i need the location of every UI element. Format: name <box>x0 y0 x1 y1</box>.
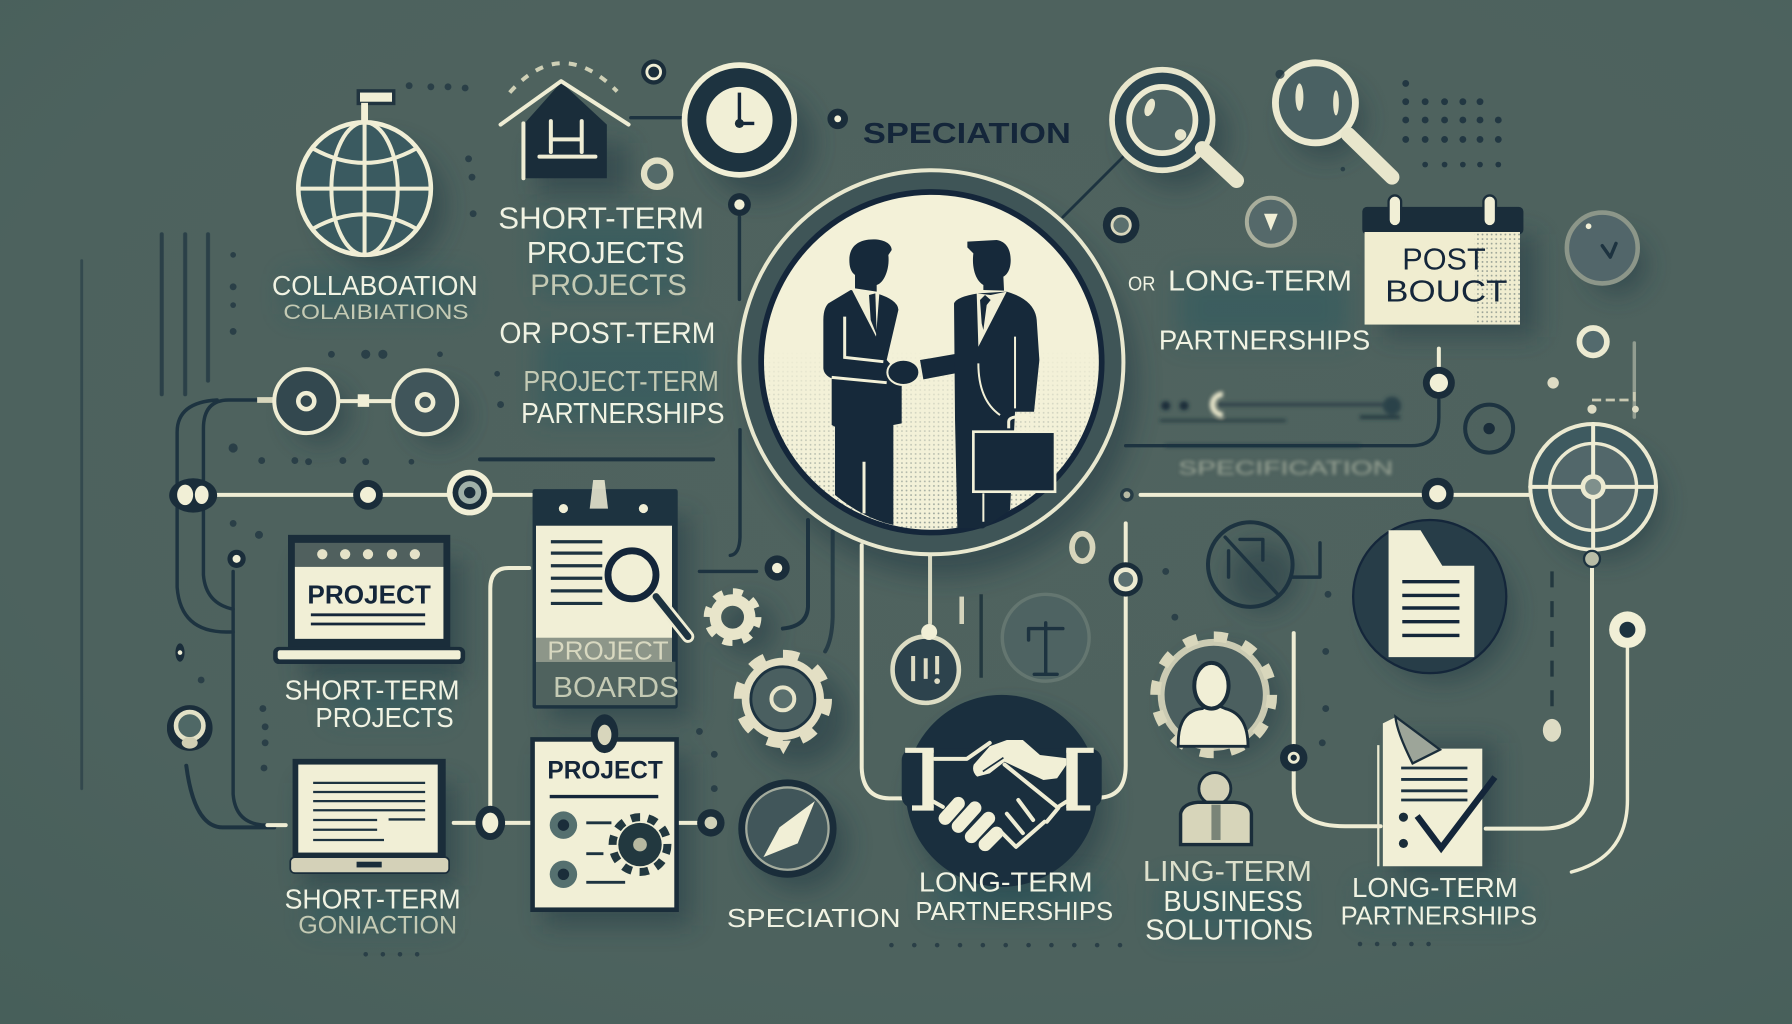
text block: long-term partnerships right: PARTNERSHIPS <box>1341 901 1537 931</box>
text block: short-term conduction <box>285 884 461 940</box>
icon: compass <box>738 779 837 878</box>
text block: collaboration <box>272 270 478 324</box>
text block: long-term partnerships upper: PARTNERSHIPS <box>1159 325 1370 356</box>
icon: document in circle <box>1353 520 1506 673</box>
text block: long-term business solutions: LING-TERM <box>1143 856 1312 888</box>
icon: linked circles <box>257 369 457 434</box>
two business people shaking hands <box>823 239 1055 528</box>
text block: short-term projects: PARTNERSHIPS <box>521 398 725 430</box>
halftone shading <box>764 362 1098 528</box>
text block: long-term business solutions <box>1143 856 1313 946</box>
icon: large gear <box>738 654 827 754</box>
small ring nodes upper left <box>641 59 848 216</box>
light connector traces <box>214 349 1627 872</box>
text block: long-term business solutions: BUSINESS <box>1163 886 1303 918</box>
blurred specification caption <box>1160 394 1401 479</box>
icon: magnifier two <box>1275 63 1392 177</box>
text block: short-term conduction: SHORT-TERM <box>285 884 461 915</box>
text block: long-term partnerships right <box>1341 872 1537 931</box>
text block: short-term projects: PROJECTS <box>530 269 687 302</box>
text block: collaboration: COLLABOATION <box>272 270 478 301</box>
infographic canvas <box>80 59 1666 957</box>
text block: collaboration: COLAIBIATIONS <box>283 299 469 324</box>
icon: magnifier one <box>1112 70 1237 181</box>
text: speciation lower: SPECIATION <box>727 903 901 933</box>
text block: long-term partnerships upper <box>1128 265 1370 356</box>
text block: long-term partnerships upper: OR <box>1128 272 1155 295</box>
text block: long-term business solutions: SOLUTIONS <box>1145 914 1313 946</box>
text block: short-term projects: OR POST-TERM <box>499 317 715 350</box>
text block: short-term projects: PROJECTS <box>527 235 685 270</box>
icon: handshake <box>902 695 1102 887</box>
icon: calendar post: BOUCT <box>1385 274 1508 309</box>
text block: long-term partnerships right: LONG-TERM <box>1352 872 1518 903</box>
text block: long-term partnerships centre: PARTNERSHIPS <box>915 896 1113 926</box>
text block: long-term partnerships centre: LONG-TERM <box>919 866 1093 897</box>
icon: house <box>501 63 629 178</box>
decorative background traces <box>82 234 1634 789</box>
icon: calendar post <box>1362 195 1523 325</box>
text block: short-term conduction: GONIACTION <box>298 912 457 940</box>
dot grid upper right <box>1402 80 1502 167</box>
icon: person with tie <box>1181 773 1251 845</box>
text block: short-term projects: PROJECT-TERM <box>523 366 719 398</box>
icon: small gear <box>707 592 758 642</box>
icon: clock <box>685 65 794 175</box>
text block: short-term projects <box>498 201 725 430</box>
icon: calendar post: POST <box>1402 242 1486 277</box>
soft shadows <box>290 81 1663 926</box>
medallion rings <box>739 170 1123 554</box>
connector nodes lower left <box>475 806 725 840</box>
text block: short-term projects lower <box>285 674 459 733</box>
blurred specification caption: SPECIFICATION <box>1178 457 1393 479</box>
icon: project clipboard with gear <box>530 714 679 912</box>
icon: document with check mark <box>1378 717 1495 866</box>
small circular icons right of medallion <box>1103 198 1638 283</box>
text block: long-term partnerships upper: LONG-TERM <box>1168 265 1352 297</box>
icon: project board with magnifier: PROJECT <box>547 635 669 665</box>
icon: project board with magnifier <box>533 480 688 709</box>
icon: crossed circle <box>1208 522 1320 607</box>
connector nodes right <box>1120 328 1639 510</box>
text block: short-term projects lower: SHORT-TERM <box>285 674 459 705</box>
line nodes left <box>167 470 790 751</box>
icon: laptop with project label: PROJECT <box>307 579 431 609</box>
text block: short-term projects: SHORT-TERM <box>498 201 704 236</box>
small nodes centre bottom <box>893 534 1646 771</box>
handshake disc <box>902 695 1102 887</box>
decorative dots <box>198 70 1431 957</box>
icon: target crosshair <box>1530 424 1656 567</box>
heading: specification: SPECIATION <box>863 118 1071 150</box>
icon: globe with flag <box>298 89 431 255</box>
panel: central handshake medallion <box>739 170 1123 554</box>
text block: long-term partnerships centre <box>915 866 1113 926</box>
text glows <box>286 217 1526 937</box>
text block: short-term projects lower: PROJECTS <box>315 702 454 733</box>
icon: project board with magnifier: BOARDS <box>553 672 679 704</box>
icon: project clipboard with gear: PROJECT <box>547 756 663 784</box>
icon: laptop with project label <box>273 535 465 664</box>
icon: person in gear <box>1155 637 1272 753</box>
icon: laptop with document <box>290 759 449 873</box>
dark connector traces <box>177 118 1439 827</box>
